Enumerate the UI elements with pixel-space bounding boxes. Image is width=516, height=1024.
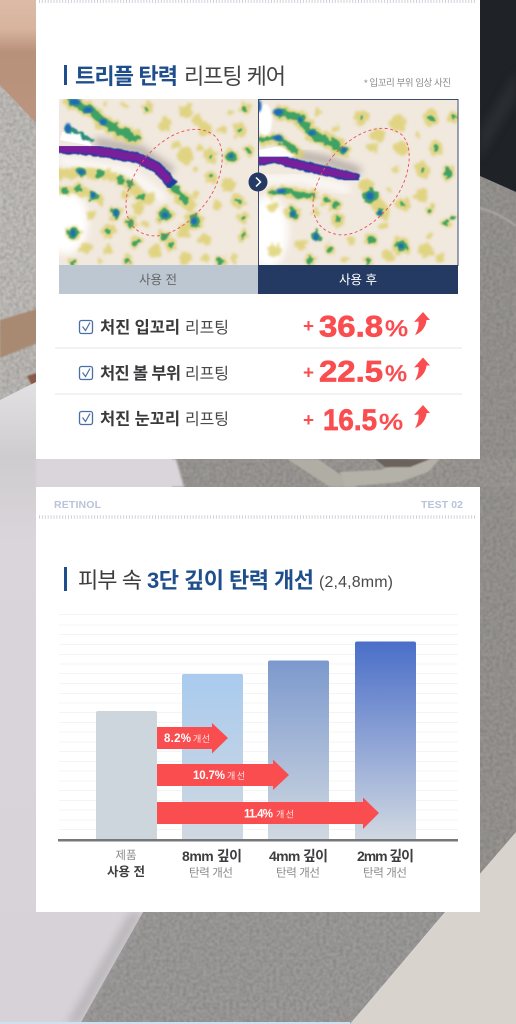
row: cheek lifting [80,356,430,388]
label: before use: 사용 전 [139,273,177,287]
header: retinol: RETINOL [54,499,102,511]
row: eye corner lifting: 16.5 [323,404,377,437]
row: cheek lifting: 리프팅 [185,365,229,383]
axis label: 4mm: 탄력 개선 [276,866,320,880]
panel: triple elasticity lifting care [36,0,480,459]
label: after use [258,265,458,294]
heading: triple elasticity [64,64,286,89]
row: mouth corner lifting [80,310,430,344]
heading: triple elasticity: 트리플 탄력 [75,64,178,89]
axis label: 8mm: 8mm 깊이 [182,848,242,864]
row: cheek lifting: % [385,361,407,386]
row: eye corner lifting: 처진 눈꼬리 [100,410,180,428]
axis label: before use [107,849,145,879]
bar chart [58,614,458,842]
arrow: 10.7%: 개선 [227,771,245,781]
arrow: 8.2% [157,723,228,754]
row: mouth corner lifting: % [385,316,408,341]
dashed outline: before [126,129,222,236]
heading: skin depth improvement: (2,4,8mm) [319,574,393,591]
bar: 4mm [268,660,329,839]
header: test 02: TEST 02 [421,499,463,511]
row: eye corner lifting: + [303,410,314,430]
axis label: before use: 제품 [115,849,137,862]
panel: 3-depth elasticity improvement [36,487,480,912]
bar: before use [96,711,157,839]
row: mouth corner lifting: 처진 입꼬리 [100,318,180,337]
row: cheek lifting: 22.5 [319,356,383,388]
axis label: 2mm: 2mm 깊이 [357,848,414,864]
heading: triple elasticity: 리프팅 케어 [184,64,286,89]
axis label: 2mm: 탄력 개선 [363,866,407,880]
arrow: 11.4% [157,798,379,829]
dashed outline: after [313,128,409,235]
axis label: before use: 사용 전 [107,865,145,879]
image: after heat map [248,100,459,268]
row: eye corner lifting: % [379,410,403,434]
axis label: 2mm [357,848,414,880]
row: mouth corner lifting: 36.8 [319,310,383,344]
axis label: 4mm [269,848,328,880]
arrow: 11.4%: 11.4% [244,808,273,820]
note: clinical photo: * 입꼬리 부위 임상 사진 [364,77,451,89]
row: cheek lifting: 처진 볼 부위 [100,364,181,383]
image: before heat map [44,99,258,267]
row: cheek lifting: + [303,362,314,382]
bar: 8mm [182,674,243,839]
heading: skin depth improvement: 피부 속 [78,568,142,593]
axis label: 8mm: 탄력 개선 [189,866,233,880]
heading: skin depth improvement: 3단 깊이 탄력 개선 [147,568,314,593]
label: after use: 사용 후 [339,273,377,287]
arrow: 10.7%: 10.7% [193,770,225,782]
icon: next arrow [248,172,268,192]
label: before use [59,265,258,294]
arrow: 8.2%: 개선 [193,734,210,744]
axis label: 4mm: 4mm 깊이 [269,848,328,864]
heading: skin depth improvement [64,567,393,593]
arrow: 8.2%: 8.2% [164,733,191,745]
row: mouth corner lifting: 리프팅 [185,319,229,337]
bar: 2mm [355,642,416,839]
row: eye corner lifting [80,404,430,437]
row: eye corner lifting: 리프팅 [185,410,229,428]
arrow: 10.7% [157,760,289,790]
arrow: 11.4%: 개선 [276,810,294,820]
axis label: 8mm [182,848,242,880]
row: mouth corner lifting: + [303,316,314,336]
